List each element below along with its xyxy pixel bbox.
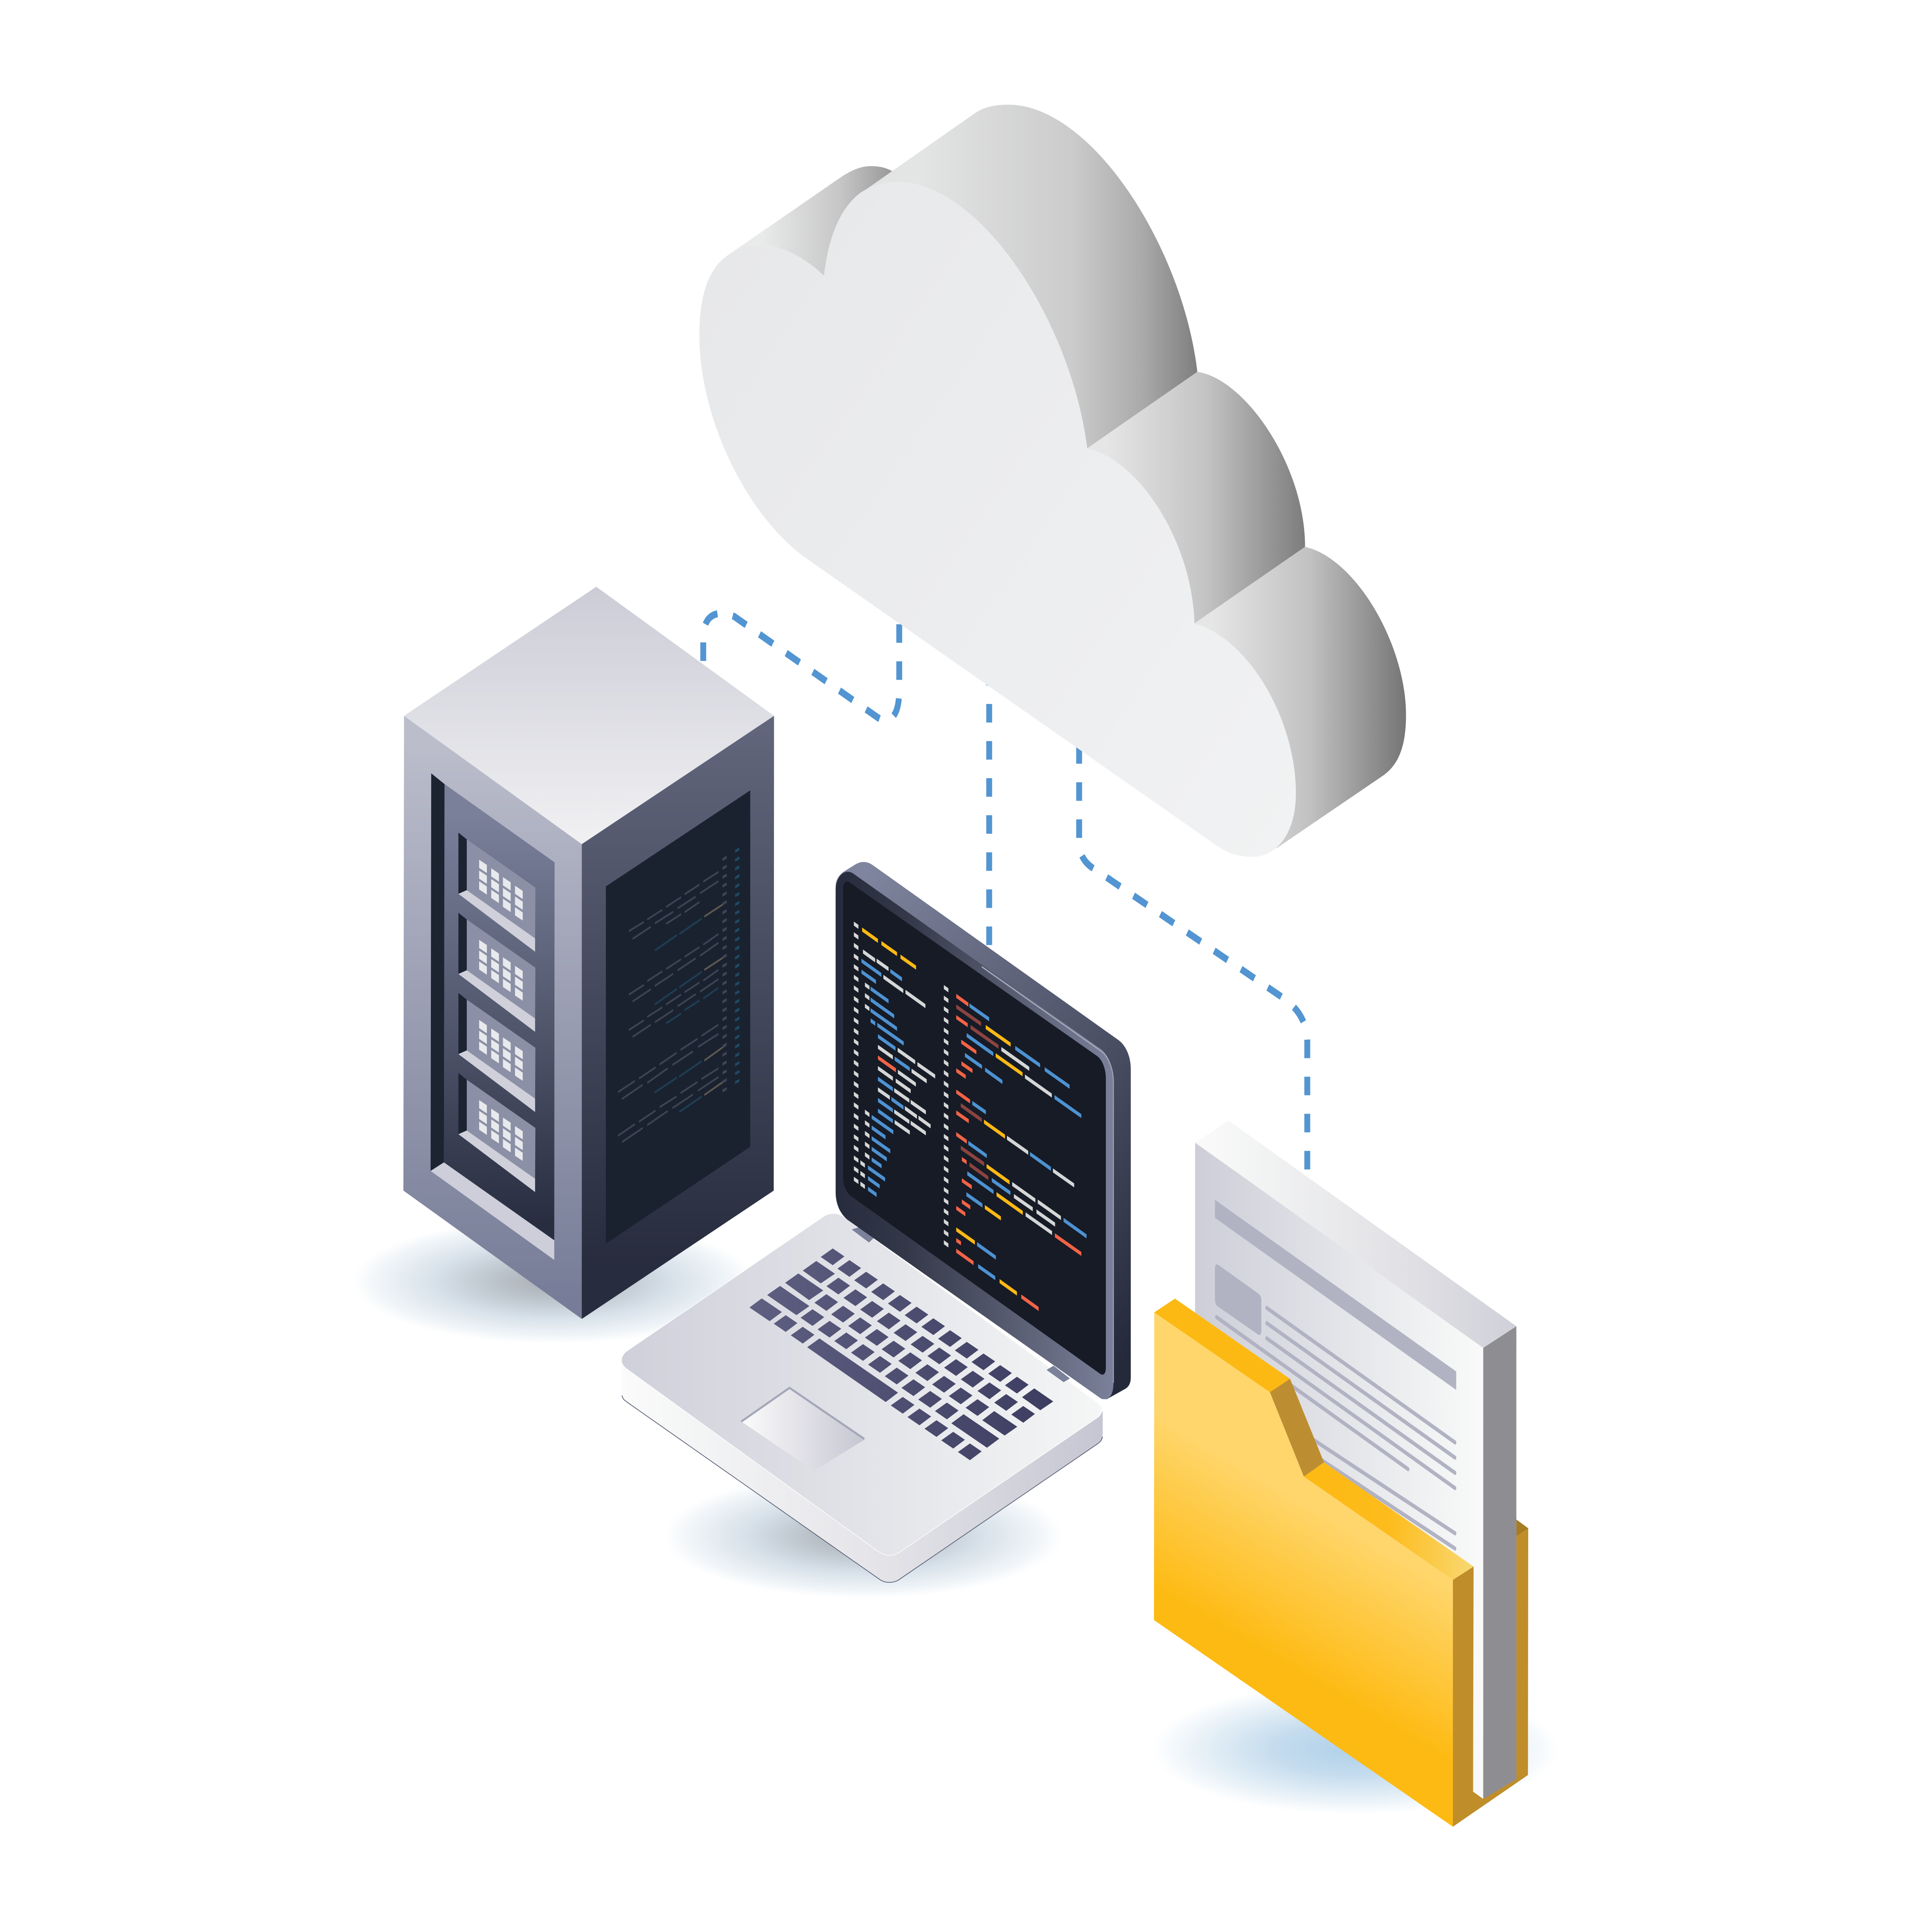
document heading bar	[1215, 1200, 1456, 1390]
shadow: folder	[1151, 1684, 1560, 1815]
connector: cloud to folder	[1079, 705, 1307, 1169]
folder side	[1453, 1566, 1483, 1827]
server bay floor	[430, 1162, 554, 1260]
document text lines	[1216, 1308, 1455, 1549]
server top face	[404, 587, 774, 844]
code: red tokens	[878, 994, 1081, 1311]
folder back panel	[1453, 1528, 1528, 1827]
drive slot 1	[458, 833, 536, 952]
code: white tokens	[861, 949, 1074, 1235]
folder back top edge	[1516, 1519, 1528, 1536]
lid rear and side	[836, 862, 1131, 1399]
connector: cloud to laptop	[985, 668, 993, 945]
server left face	[403, 716, 582, 1319]
server display code lines	[618, 849, 737, 1142]
shadow: laptop	[664, 1474, 1063, 1598]
cloud depth: middle lobe	[1087, 372, 1305, 623]
lid bezel	[836, 872, 1114, 1399]
laptop lid	[836, 862, 1131, 1399]
folder notch	[1270, 1379, 1324, 1476]
folder front	[1154, 1313, 1453, 1827]
code: blue tokens	[861, 959, 1087, 1280]
cloud depth: right lobe	[1194, 547, 1406, 848]
cloud	[699, 105, 1406, 857]
touchpad recess edge	[741, 1388, 864, 1439]
laptop deck	[621, 1213, 1102, 1555]
server bay interior	[444, 784, 554, 1240]
drive slot 2	[458, 913, 536, 1032]
server rack	[403, 587, 774, 1319]
laptop hinges	[852, 1226, 1070, 1382]
server side display	[606, 790, 750, 1243]
document top edge	[1195, 1121, 1516, 1348]
laptop base bottom edge	[622, 1396, 1102, 1582]
connector: cloud to server	[703, 594, 899, 720]
server right face	[582, 716, 774, 1319]
laptop base side	[621, 1360, 1103, 1582]
code: dark red tokens	[956, 1005, 998, 1180]
folder with document	[1154, 1121, 1528, 1827]
line number column middle	[942, 986, 950, 1252]
cloud depth: large lobe	[859, 105, 1197, 448]
folder top edge	[1304, 1462, 1474, 1580]
drive slot 3	[458, 993, 536, 1112]
touchpad	[742, 1389, 865, 1471]
cloud front face	[699, 182, 1296, 857]
keyboard	[750, 1248, 1053, 1460]
laptop base	[621, 1213, 1103, 1582]
line number column left	[852, 923, 860, 1189]
document page	[1195, 1143, 1483, 1799]
shadow: server	[352, 1219, 754, 1344]
server bay left wall	[430, 773, 444, 1171]
code: yellow tokens	[862, 927, 1023, 1296]
cloud depth: left lobe	[730, 166, 893, 276]
laptop screen	[843, 881, 1106, 1375]
folder tab top edge	[1154, 1299, 1290, 1392]
document side	[1483, 1326, 1516, 1799]
drive slot 4	[458, 1073, 536, 1192]
document image placeholder	[1215, 1264, 1261, 1335]
lid highlight	[982, 967, 1114, 1383]
